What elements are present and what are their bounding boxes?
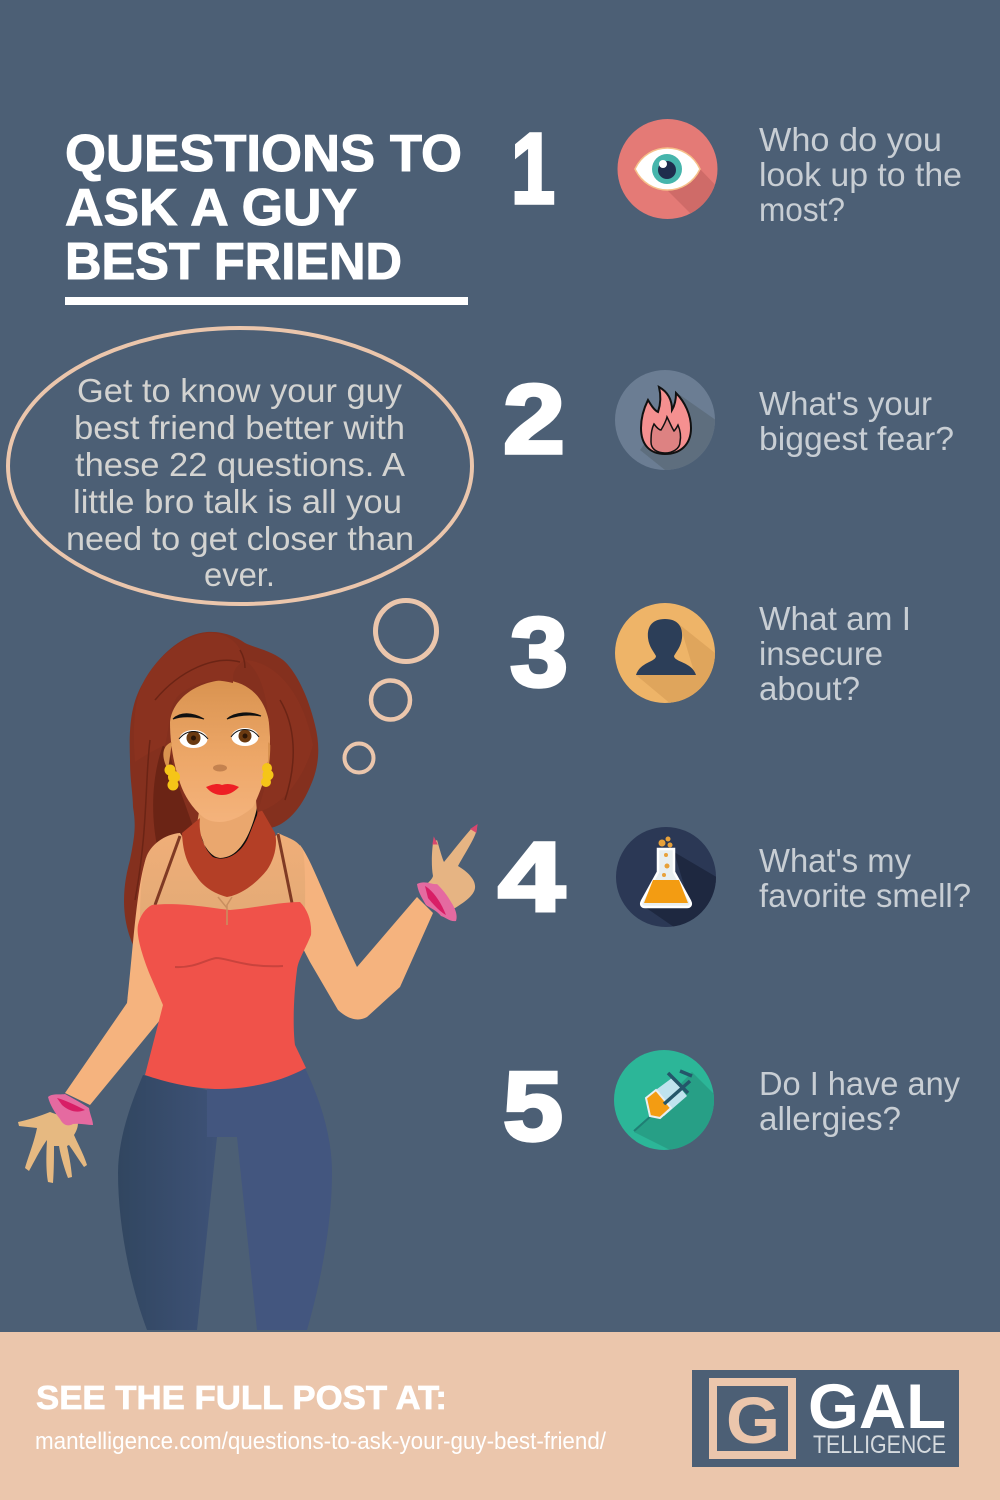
icon: syringe bbox=[614, 1050, 714, 1150]
question 1: most? bbox=[759, 191, 845, 228]
question 3: insecure bbox=[759, 635, 883, 672]
right eyebrow bbox=[227, 713, 261, 719]
icon: eye bbox=[618, 119, 725, 219]
footer band bbox=[0, 1332, 1000, 1500]
arm right bbox=[296, 845, 433, 1019]
title underline bbox=[65, 297, 468, 305]
icon: flame bbox=[615, 370, 715, 470]
thought bubble with intro text bbox=[8, 328, 472, 604]
number 2: 2 bbox=[503, 364, 565, 474]
neck bbox=[196, 800, 258, 860]
thought bubble circles bbox=[344, 600, 436, 772]
chest and shoulders bbox=[140, 833, 305, 925]
left scrunchie bbox=[48, 1094, 93, 1125]
logo: GAL bbox=[808, 1372, 946, 1442]
title: BEST FRIEND bbox=[65, 233, 402, 291]
top straps bbox=[155, 834, 292, 905]
right hand bbox=[422, 827, 477, 913]
question 1: look up to the bbox=[759, 156, 962, 193]
thought bubble with intro text: Get to know your guy bbox=[77, 372, 403, 409]
question 2: biggest fear? bbox=[759, 420, 954, 457]
title: ASK A GUY bbox=[65, 179, 357, 237]
logo bbox=[692, 1370, 959, 1467]
woman illustration bbox=[18, 632, 477, 1330]
number 1: 1 bbox=[511, 113, 555, 225]
face bbox=[170, 680, 270, 822]
question 2 bbox=[759, 385, 954, 457]
lips bbox=[206, 784, 239, 795]
question 4 bbox=[759, 842, 971, 914]
right eye bbox=[231, 728, 259, 746]
question 5: allergies? bbox=[759, 1100, 901, 1137]
icon: flask bbox=[616, 827, 716, 927]
pants bbox=[118, 1068, 332, 1330]
number 5: 5 bbox=[503, 1051, 563, 1161]
number 3: 3 bbox=[510, 597, 568, 707]
question 1: Who do you bbox=[759, 121, 942, 158]
right earring bbox=[261, 763, 274, 787]
right scrunchie bbox=[417, 882, 457, 921]
necklace bbox=[218, 897, 232, 925]
icon: person bbox=[615, 603, 715, 703]
red top bbox=[138, 902, 311, 1089]
question 5: Do I have any bbox=[759, 1065, 960, 1102]
nose bbox=[213, 764, 227, 772]
question 3: What am I bbox=[759, 600, 911, 637]
footer url: mantelligence.com/questions-to-ask-your-guy-best-friend/ bbox=[35, 1428, 606, 1455]
question 3: about? bbox=[759, 670, 860, 707]
ears bbox=[163, 742, 273, 772]
logo: G bbox=[726, 1383, 780, 1457]
left hand bbox=[18, 1112, 87, 1183]
arm left bbox=[65, 858, 163, 1105]
top fold line bbox=[175, 958, 283, 967]
back hair bbox=[124, 632, 318, 945]
question 4: What's my bbox=[759, 842, 911, 879]
dark hair shadow bbox=[153, 745, 195, 850]
question 4: favorite smell? bbox=[759, 877, 971, 914]
right leg bbox=[207, 1068, 332, 1330]
left leg bbox=[118, 1075, 217, 1330]
front hair left bbox=[134, 633, 245, 762]
scarf bbox=[182, 807, 276, 897]
left eyebrow bbox=[173, 714, 204, 719]
footer heading: SEE THE FULL POST AT: bbox=[36, 1379, 447, 1416]
right nails bbox=[433, 825, 477, 844]
title: QUESTIONS TO bbox=[65, 125, 462, 183]
thought bubble with intro text: best friend better with bbox=[74, 409, 405, 446]
left earring bbox=[164, 764, 180, 790]
collar shadow bbox=[198, 808, 258, 864]
question 2: What's your bbox=[759, 385, 932, 422]
question 5 bbox=[759, 1065, 960, 1137]
thought bubble with intro text: these 22 questions. A bbox=[75, 446, 405, 483]
thought bubble with intro text: need to get closer than bbox=[66, 520, 414, 557]
logo: TELLIGENCE bbox=[813, 1431, 946, 1459]
question 3 bbox=[759, 600, 911, 707]
number 4: 4 bbox=[498, 822, 565, 932]
hair strands bbox=[135, 650, 293, 900]
title bbox=[65, 125, 462, 291]
question 1 bbox=[759, 121, 962, 228]
hair right lock bbox=[245, 660, 313, 812]
thought bubble with intro text: ever. bbox=[204, 556, 275, 593]
thought bubble with intro text: little bro talk is all you bbox=[73, 483, 402, 520]
left eye bbox=[179, 730, 208, 748]
